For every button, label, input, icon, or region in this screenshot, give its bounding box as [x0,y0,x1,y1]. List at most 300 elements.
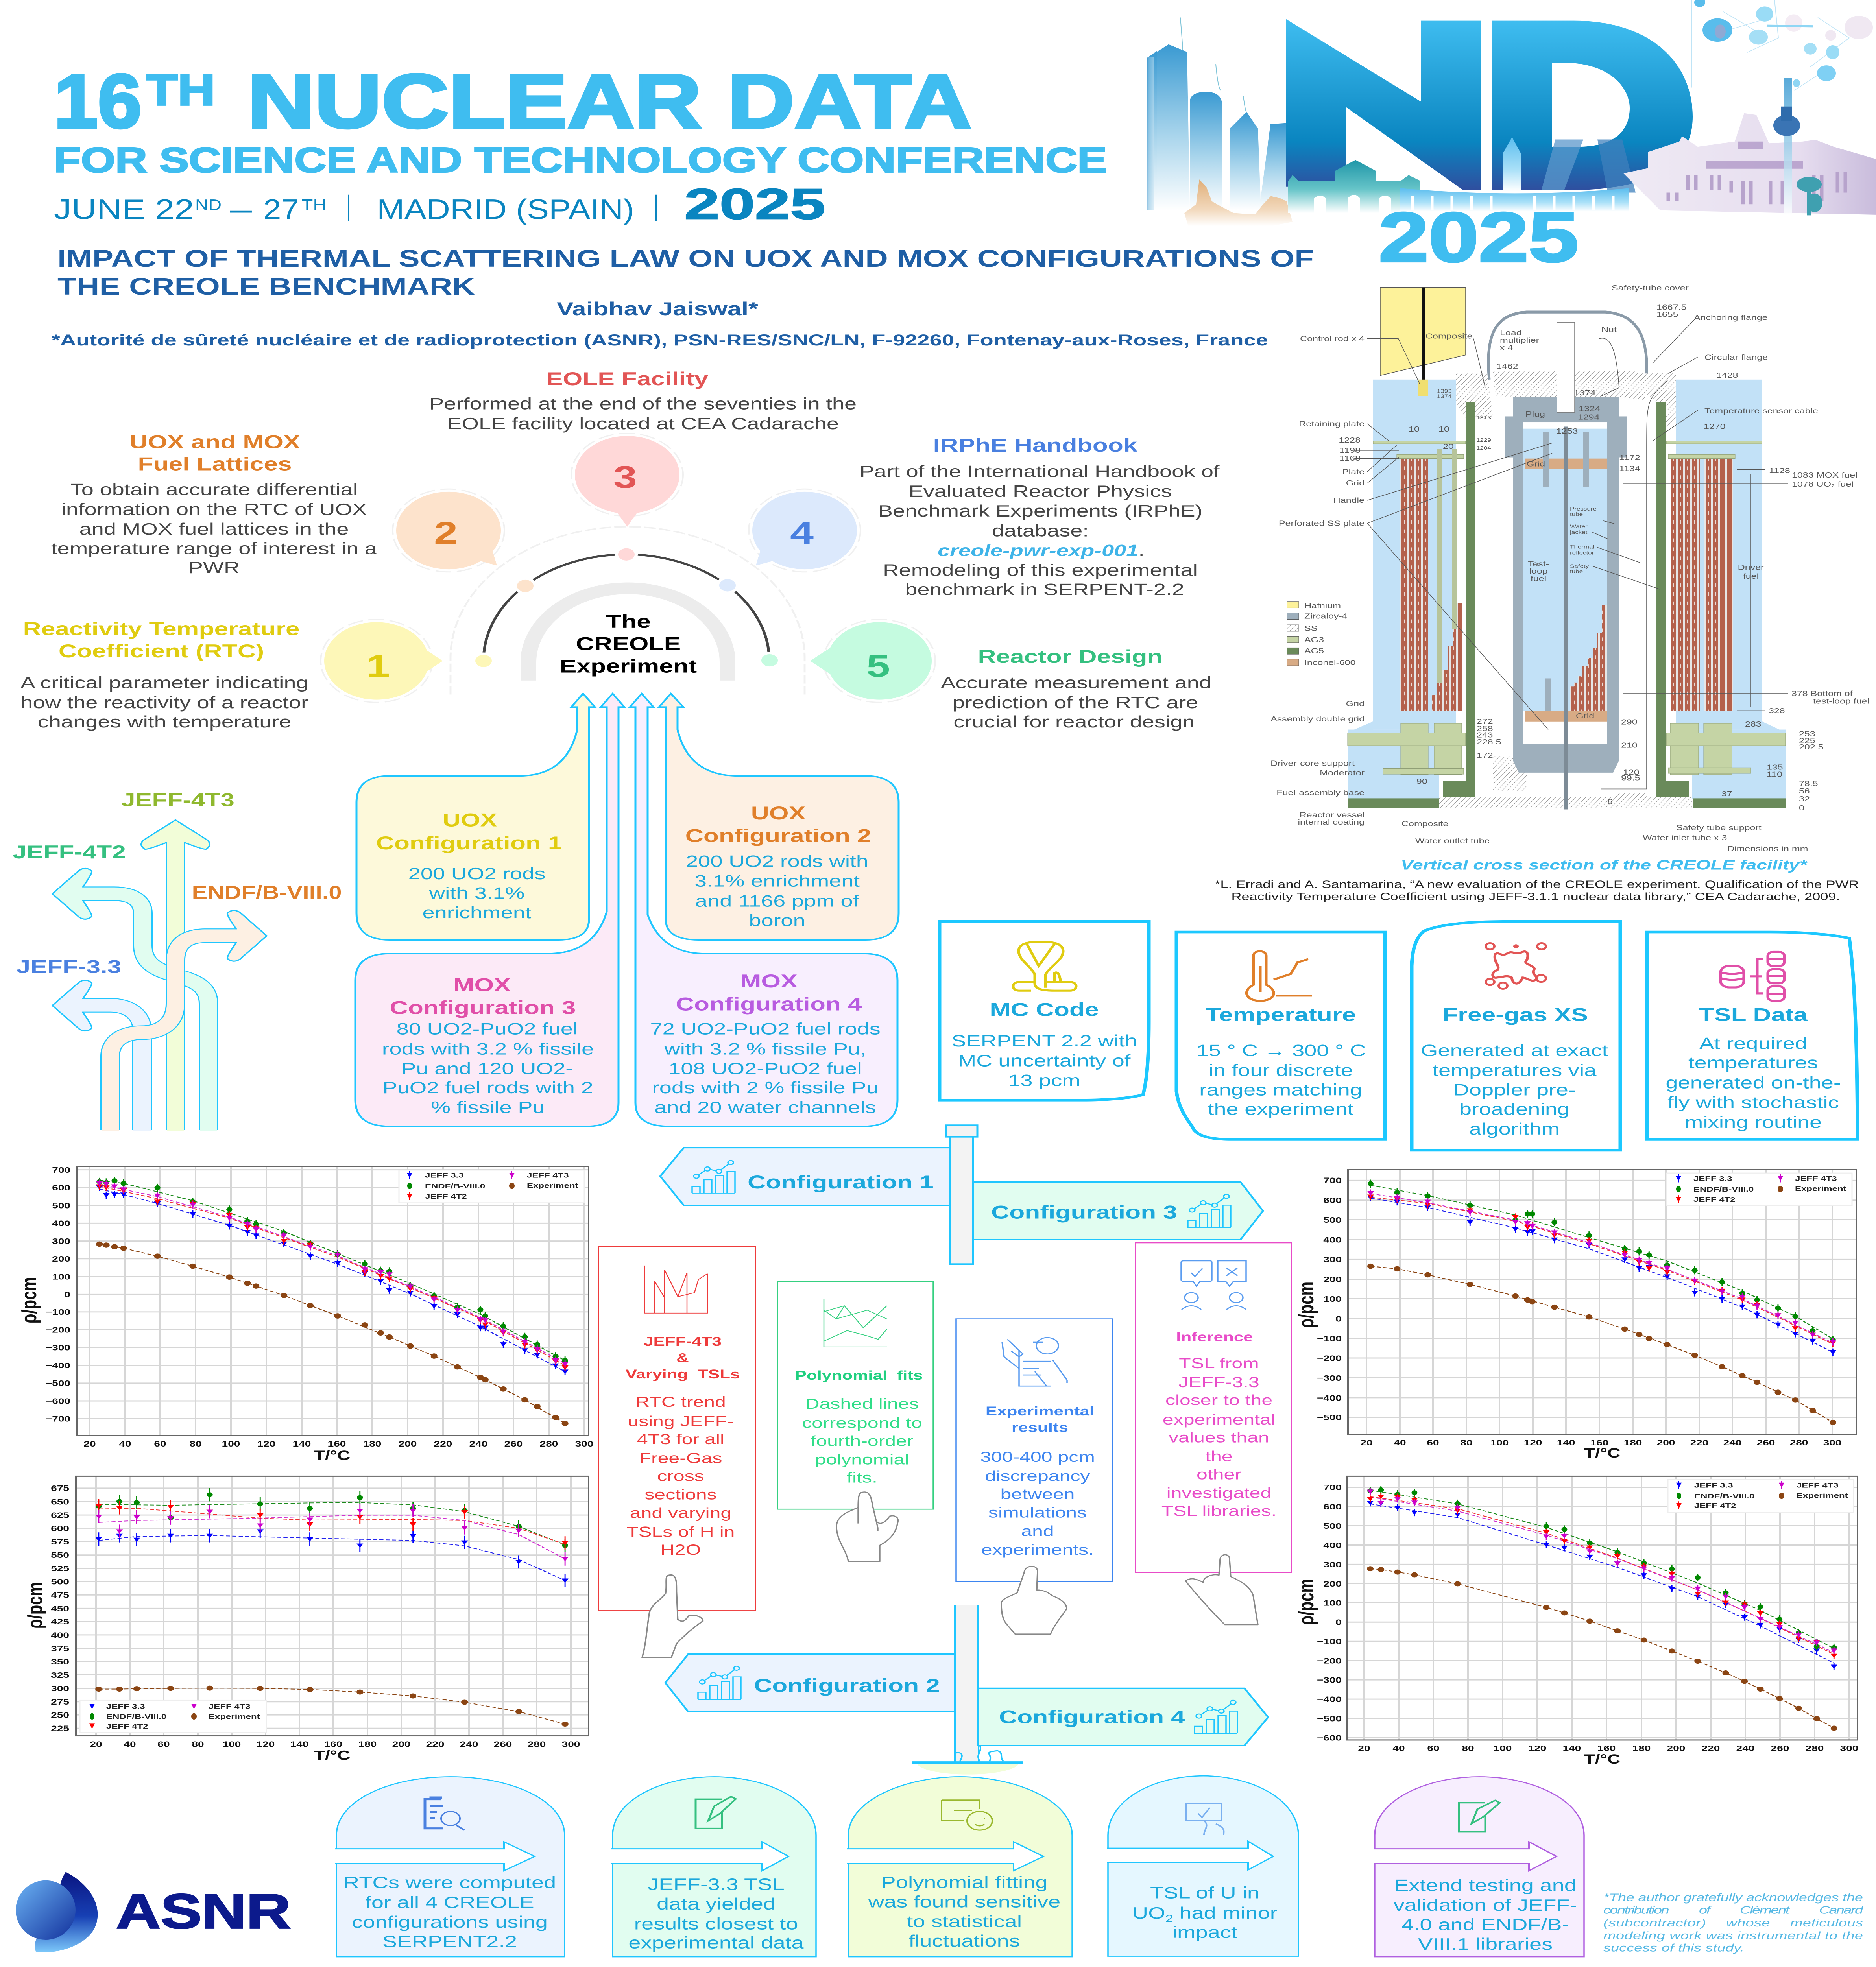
conference title [54,58,1107,180]
axis tick labels: 300 [1823,1438,1841,1447]
axis tick labels: −600 [1317,1734,1342,1742]
reactor labels: Grid [1527,459,1545,468]
reactor labels: Handle [1333,496,1365,504]
reactor labels: Composite [1401,819,1448,828]
card: MOX configuration 3: Pu and 120 UO2- [401,1059,573,1078]
panel: JEFF-4T3 and varying TSLs: cross [657,1468,704,1484]
axis tick labels: 300 [1840,1744,1858,1753]
acknowledgement [1603,1891,1864,1954]
reference citation [1215,878,1859,902]
arch: RTCs computed: configurations using [352,1913,548,1931]
reactor labels: Composite [1425,332,1472,340]
legend [1668,1480,1854,1512]
axis tick labels: −100 [46,1308,70,1317]
axis tick labels: −100 [1317,1334,1342,1343]
semicircle diagram: the CREOLE experiment [451,527,805,694]
axis tick labels: 100 [1323,1599,1342,1608]
panel: JEFF-4T3 and varying TSLs: 4T3 for all [637,1431,724,1447]
axis tick labels [46,1166,593,1448]
reactor labels: 10 [1409,425,1420,433]
arch: TSL of U: had minor [1173,1904,1277,1922]
axis tick labels: 100 [1494,1744,1512,1753]
panel: polynomial fits: fits. [847,1470,877,1486]
reactor labels: Circular flange [1704,353,1768,362]
reactor labels: 1134 [1619,464,1640,472]
info box: MC code: MC Code [990,999,1099,1020]
reactor labels: 1655 [1656,310,1678,319]
axis tick labels: 325 [51,1671,69,1680]
reactor labels: tube [1570,569,1583,574]
axis tick labels: 40 [119,1439,131,1448]
info box: TSL data: generated on-the- [1666,1074,1841,1092]
card: UOX configuration 2: boron [749,912,805,930]
axis tick labels: 160 [328,1439,346,1448]
panel: inference: values than [1169,1430,1269,1446]
card: MOX configuration 4 [630,694,897,1126]
text: IRPhE handbook: Remodeling of this experimental [883,561,1198,579]
reference citation: *L. Erradi and A. Santamarina, “A new evaluation of the CREOLE experiment. Qualification of the PWR [1215,878,1859,890]
arrow labels: JEFF-4T3 [121,789,234,810]
reactor labels: 1313 [1476,415,1491,421]
panel: polynomial fits: fourth-order [811,1433,914,1449]
reactor labels: tube [1570,511,1583,517]
reactor labels: SS [1304,624,1317,633]
text: EOLE facility: Performed at the end of the seventies in the [429,395,857,413]
reactor labels: 135 [1767,763,1783,771]
bear statue [1797,177,1822,215]
axis tick labels: 220 [426,1740,444,1749]
info box: MC code: 13 pcm [1008,1072,1080,1090]
legend: Experiment [527,1182,578,1190]
reactor labels: Fuel-assembly base [1276,788,1365,797]
axis tick labels: 500 [51,1578,69,1587]
Kio towers [1542,140,1636,193]
reactor labels: Inconel-600 [1304,659,1356,667]
card: UOX configuration 1: UOX [443,810,497,830]
axis tick labels: 280 [1806,1744,1824,1753]
chart: configuration 2: ρ/pcm [23,1582,47,1629]
arch: extend testing: Extend testing and [1394,1876,1577,1895]
acknowledgement: modeling work was instrumental to the [1603,1930,1863,1942]
bubble 4 [749,489,860,572]
reactor labels: Reactor vessel [1300,811,1365,819]
panel: experimental results: experiments. [981,1542,1094,1558]
axis tick labels: 200 [1667,1744,1685,1753]
arch: RTCs computed: for all 4 CREOLE [365,1893,534,1912]
bubble 3: 3 [613,460,637,495]
axis tick labels: −200 [1317,1657,1342,1666]
bubble 2: 2 [434,515,458,551]
reactor labels: 1324 [1579,404,1601,413]
reactor labels: 1228 [1339,436,1361,444]
axis tick labels: 280 [528,1740,546,1749]
arch: RTCs computed [335,1777,565,1957]
axis tick labels: 280 [540,1439,558,1448]
arrow: JEFF-3.3 [52,980,142,1131]
info box: TSL data: mixing routine [1685,1113,1822,1131]
reactor labels: Load [1500,328,1522,337]
reactor labels: 10 [1438,425,1449,433]
axis tick labels: 160 [324,1740,342,1749]
axis tick labels: −700 [46,1415,70,1424]
axis tick labels: −500 [1317,1413,1342,1422]
info box: free-gas XS [1412,921,1620,1150]
info box: free-gas XS: Generated at exact [1421,1041,1608,1060]
panel: inference: closer to the [1165,1392,1272,1408]
card: UOX configuration 2: Configuration 2 [685,825,871,846]
card: MOX configuration 4: 108 UO2-PuO2 fuel [668,1059,862,1078]
card: MOX configuration 3: MOX [453,974,511,995]
arch: TSL of U: impact [1172,1923,1237,1941]
axis tick labels: 450 [51,1604,69,1613]
legend [399,1170,584,1203]
info box: free-gas XS: broadening [1459,1100,1569,1118]
reactor labels: Nut [1601,325,1617,334]
axis tick labels: 160 [1590,1438,1608,1447]
reactor labels: Moderator [1320,769,1365,777]
axis tick labels: 200 [1323,1275,1342,1284]
panel: inference: TSL libraries. [1161,1503,1276,1519]
chart: configuration 1: T/°C [314,1448,350,1463]
axis tick labels: 120 [1524,1438,1542,1447]
reference citation: Reactivity Temperature Coefficient using JEFF-3.1.1 nuclear data library,” CEA Cadarache, 2009. [1231,891,1840,902]
text: IRPhE handbook: Part of the International Handbook of [859,463,1220,481]
card: MOX configuration 4: MOX [740,971,798,991]
axis tick labels: 200 [1657,1438,1675,1447]
colonnade and column [1400,137,1629,212]
reactor labels: 290 [1621,718,1638,726]
axis tick labels [1317,1176,1841,1447]
icon: molecule blob [1493,952,1537,984]
chart: configuration 1: ρ/pcm [17,1277,41,1323]
reactor labels: 20 [1443,442,1454,450]
info box: MC code [940,921,1149,1100]
sign: configuration 2: Configuration 2 [754,1675,940,1696]
sign: configuration 2 [665,1654,954,1712]
axis tick labels: 60 [154,1439,166,1448]
reactor labels: Temperature sensor cable [1704,406,1818,415]
signpost upper post [946,1125,977,1264]
panel: polynomial fits [777,1281,933,1509]
text: IRPhE handbook: benchmark in SERPENT-2.2 [905,580,1184,599]
icon: document and magnifier [425,1797,443,1829]
reactor labels: Plug [1525,410,1545,418]
skyscrapers [1147,18,1289,210]
info box: TSL data [1647,932,1858,1139]
axis tick labels: 60 [1427,1744,1440,1753]
legend: ENDF/B-VIII.0 [106,1713,166,1721]
axis tick labels: 500 [1323,1216,1342,1225]
arch: polynomial fitting: fluctuations [908,1932,1020,1950]
icon: checklist with hands [1002,1340,1067,1386]
panel: experimental results: Experimental [986,1404,1094,1419]
reactor labels: 1294 [1578,413,1600,421]
arch: extend testing: VIII.1 libraries [1418,1935,1553,1954]
text: UOX and MOX fuel lattices: information on the RTC of UOX [61,500,367,519]
date and location: 2025 [684,180,825,228]
panel: polynomial fits: correspond to [802,1415,922,1431]
text: reactor design: crucial for reactor design [953,713,1195,731]
axis tick labels: 260 [504,1439,523,1448]
axis tick labels: 525 [51,1565,69,1573]
card: MOX configuration 3: % fissile Pu [431,1098,545,1116]
conference title: NUCLEAR DATA [247,58,971,144]
Alcala gate [1288,160,1420,213]
axis tick labels: 300 [1323,1255,1342,1264]
poster title: THE CREOLE BENCHMARK [57,273,475,300]
reactor labels: multiplier [1500,336,1539,344]
reactor labels: x 4 [1500,343,1513,352]
affiliation: *Autorité de sûreté nucléaire et de radioprotection (ASNR), PSN-RES/SNC/LN, F-92260, Fontenay-aux-Roses, France [52,332,1268,349]
card: UOX configuration 1: Configuration 1 [376,832,562,853]
info box: free-gas XS: temperatures via [1432,1061,1597,1079]
reactor labels: Driver [1738,563,1764,572]
centre label: Experiment [560,656,697,677]
axis tick labels: 220 [434,1439,452,1448]
reactor labels: Assembly double grid [1270,715,1365,723]
legend: JEFF 3.3 [1694,1482,1733,1489]
arch: JEFF-3.3 TSL: results closest to [634,1915,798,1933]
reactor labels: fuel [1531,574,1546,583]
panel: JEFF-4T3 and varying TSLs: and varying [630,1505,731,1521]
axis tick labels: 180 [363,1439,381,1448]
card: UOX configuration 2 [659,694,899,940]
reactor labels: Safety-tube cover [1612,284,1689,292]
axis tick labels: −300 [1317,1374,1342,1383]
text: IRPhE handbook: database: [992,522,1089,540]
date and location: JUNE 22 [54,193,194,225]
reactor labels [1270,284,1869,853]
text: reactor design: Reactor Design [978,646,1163,667]
axis tick labels: 60 [1427,1438,1439,1447]
axis tick labels: 20 [1360,1438,1373,1447]
panel: experimental results: results [1012,1421,1068,1435]
reactor labels: 272 [1477,717,1493,725]
axis tick labels: 80 [1462,1744,1474,1753]
reactor labels: Grid [1346,479,1365,487]
chart: configuration 4: ρ/pcm [1294,1579,1318,1625]
legend: JEFF 4T2 [1693,1196,1736,1203]
axis tick labels: 80 [1460,1438,1473,1447]
reactor labels: 0 [1799,804,1804,812]
text: IRPhE handbook: creole-pwr-exp-001. [938,542,1145,560]
chart: configuration 4: T/°C [1584,1751,1620,1767]
card: UOX configuration 2: UOX [751,803,806,823]
axis tick labels: −500 [1317,1714,1342,1723]
molecules top right [1692,0,1873,90]
text: UOX and MOX fuel lattices: UOX and MOX [129,431,300,452]
reactor labels: 210 [1621,741,1638,749]
reactor labels: internal coating [1298,818,1365,826]
arch: RTCs computed: SERPENT2.2 [382,1932,517,1951]
axis tick labels: 40 [124,1740,136,1749]
axis tick labels: 100 [1490,1438,1509,1447]
icon: chart [1187,1194,1231,1227]
legend: JEFF 4T2 [425,1193,467,1200]
reactor labels: loop [1529,567,1548,575]
reactor labels: 1198 [1339,446,1361,454]
arch: polynomial fitting: to statistical [907,1912,1022,1931]
bubble 1 [321,620,443,702]
icon: hand under red panel [642,1575,703,1657]
icon: chart [692,1161,735,1194]
sign: configuration 3 [974,1182,1263,1240]
reactor labels: 1667.5 [1656,303,1686,312]
text: EOLE facility [429,368,857,433]
nodes [474,547,779,668]
arch: JEFF-3.3 TSL: data yielded [657,1895,776,1913]
rock formation [1184,179,1293,226]
arrow: JEFF-4T2 [52,868,209,1131]
reactor labels: AG5 [1304,647,1324,655]
legend: JEFF 4T3 [209,1703,251,1711]
legend: JEFF 4T3 [1797,1482,1839,1489]
axis tick labels: 180 [358,1740,377,1749]
date and location: ND [195,197,222,213]
icon: chart [698,1666,741,1699]
axis tick labels: 220 [1690,1438,1708,1447]
icon: speech bubbles and people [1181,1261,1246,1310]
axis tick labels: 350 [51,1657,69,1666]
reactor labels: 120 [1623,768,1640,777]
axis tick labels: 625 [51,1511,69,1520]
text: UOX and MOX fuel lattices: and MOX fuel lattices in the [79,520,349,538]
panel: inference: other [1197,1467,1241,1483]
reactor labels: 6 [1607,797,1613,806]
axis tick labels: −300 [46,1343,70,1353]
axis tick labels: 260 [494,1740,512,1749]
axis tick labels: 400 [1323,1541,1342,1550]
info box: free-gas XS: algorithm [1469,1120,1560,1138]
reactor labels: test-loop fuel [1813,697,1869,705]
axis tick labels: 200 [52,1255,70,1264]
reactor labels: 1168 [1339,454,1361,462]
axis tick labels: 260 [1757,1438,1775,1447]
axis tick labels: 300 [562,1740,580,1749]
reactor labels: 1393 [1437,388,1452,394]
axis tick labels: 425 [51,1618,69,1626]
banner illustration: ND with Madrid skyline [1147,0,1876,226]
ASNR logo [16,1872,291,1952]
acknowledgement: (subcontractor) whose meticulous [1603,1917,1863,1929]
arch: JEFF-3.3 TSL [611,1777,816,1957]
axis tick labels: 100 [222,1439,240,1448]
icon: cobra [1013,942,1076,991]
panel: experimental results: simulations [988,1505,1087,1521]
reactor labels: 1374 [1574,389,1596,397]
icon: line chart [644,1266,707,1313]
date and location: TH [301,197,327,213]
text: UOX and MOX fuel lattices: PWR [188,559,240,577]
legend: ENDF/B-VIII.0 [1693,1186,1754,1193]
chart: configuration 4 [1294,1476,1858,1767]
card: UOX configuration 1: with 3.1% [428,884,524,902]
axis tick labels: −200 [46,1326,70,1335]
reactor labels: 1428 [1716,371,1738,379]
axis tick labels: 20 [83,1439,96,1448]
palace [1623,113,1876,215]
legend: JEFF 4T2 [1694,1502,1736,1509]
panel: inference: investigated [1167,1485,1271,1501]
centre label: The [606,611,651,632]
reactor labels: 1204 [1476,445,1491,451]
axis tick labels: 700 [1323,1483,1342,1492]
panel: JEFF-4T3 and varying TSLs: H2O [661,1542,701,1558]
axis tick labels: 40 [1392,1744,1405,1753]
axis tick labels: 675 [51,1484,69,1493]
axis tick labels: 100 [52,1273,70,1282]
reactor labels: Test- [1528,560,1549,568]
info box: TSL data: At required [1699,1034,1807,1053]
axis tick labels: −600 [46,1397,70,1406]
text: UOX and MOX fuel lattices: Fuel Lattices [138,454,292,474]
arch: RTCs computed: RTCs were computed [343,1874,556,1892]
panel: JEFF-4T3 and varying TSLs: using JEFF- [628,1413,734,1430]
icon: hand under green panel [836,1492,898,1561]
axis tick labels: 375 [51,1644,69,1653]
reactor labels: 37 [1721,790,1732,798]
icon: puzzle and smile [942,1800,992,1830]
reactor labels: fuel [1743,572,1759,580]
icon: pen in square [696,1797,736,1829]
arch: polynomial fitting: was found sensitive [868,1893,1060,1911]
info box: TSL data: TSL Data [1699,1004,1808,1025]
poster title: IMPACT OF THERMAL SCATTERING LAW ON UOX AND MOX CONFIGURATIONS OF [57,245,1314,272]
card: MOX configuration 4: 72 UO2-PuO2 fuel rods [650,1020,881,1038]
reactor labels: 1462 [1496,362,1518,371]
axis tick labels: 220 [1702,1744,1720,1753]
sign: configuration 4 [979,1688,1268,1746]
card: MOX configuration 4: with 3.2 % fissile Pu, [664,1040,866,1058]
text: reactivity temperature coefficient [20,618,308,731]
reactor labels: Water [1570,524,1588,530]
axis tick labels: 0 [64,1290,70,1299]
legend: JEFF 3.3 [1693,1175,1732,1183]
axis tick labels: 80 [189,1439,202,1448]
axis tick labels: 80 [192,1740,204,1749]
axis tick labels: 300 [1323,1560,1342,1569]
card: UOX configuration 1: 200 UO2 rods [408,865,545,883]
info box: MC code: SERPENT 2.2 with [951,1032,1137,1050]
card: UOX configuration 2: 200 UO2 rods with [686,852,868,871]
bubble 3 [571,433,683,527]
axis tick labels: 60 [157,1740,170,1749]
legend: ENDF/B-VIII.0 [1694,1493,1754,1500]
axis tick labels: 100 [223,1740,241,1749]
centre label [560,611,697,677]
legend: Experiment [1797,1492,1848,1500]
reactor labels: Water outlet tube [1415,837,1490,845]
reactor labels: 1078 UO₂ fuel [1792,480,1854,488]
arrow labels: ENDF/B-VIII.0 [192,882,342,903]
card: MOX configuration 3 [355,694,624,1126]
reactor labels: Hafnium [1304,602,1341,610]
reactor labels: Plate [1342,467,1365,476]
bubble 1: 1 [366,648,390,684]
signpost lower post [955,1605,978,1762]
legend: JEFF 4T2 [106,1723,148,1730]
centre label: CREOLE [576,633,681,654]
reactor cross-section diagram [1270,277,1869,853]
legend: JEFF 4T3 [527,1172,569,1179]
axis tick labels: 300 [575,1439,593,1448]
reactor labels: Anchoring flange [1694,314,1768,322]
bubble 5: 5 [866,648,890,684]
axis tick labels: 200 [392,1740,410,1749]
legend: JEFF 3.3 [425,1172,464,1179]
axis tick labels: 600 [52,1184,70,1192]
panel: JEFF-4T3 and varying TSLs: TSLs of H in [627,1524,735,1540]
